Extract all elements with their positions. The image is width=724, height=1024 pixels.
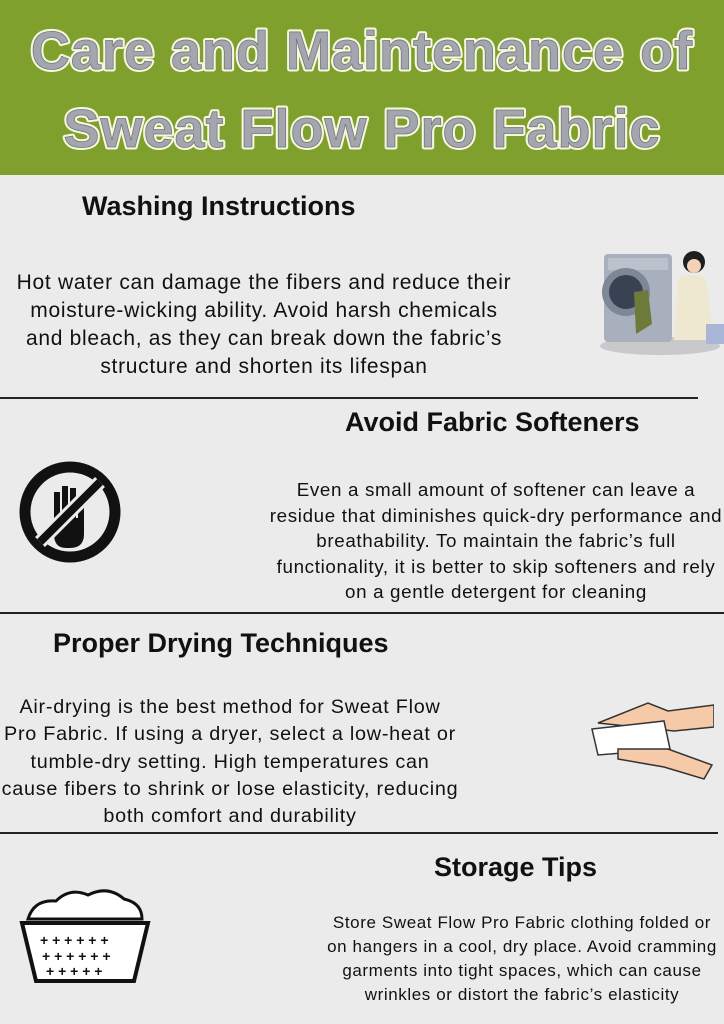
icon: laundry basket: + + + + + [46,963,102,979]
title: Care and Maintenance of [31,21,693,81]
header banner [0,0,724,175]
icon: no hand [20,462,120,562]
text: softeners: on a gentle detergent for cleaning [345,581,647,602]
text: storage: Store Sweat Flow Pro Fabric clothing folded or [333,913,711,932]
icon: hands with towel [591,702,714,780]
title [30,21,695,159]
section: washing instructions [17,191,724,378]
text: drying: Air-drying is the best method for Sweat Flow [19,696,441,718]
heading: washing: Washing Instructions [82,191,356,221]
text: softeners: residue that diminishes quick-dry performance and [270,504,722,526]
text: storage: wrinkles or distort the fabric’s elasticity [365,985,679,1004]
icon: washing machine woman [600,251,724,355]
text: softeners: Even a small amount of softener can leave a [297,479,695,500]
text: storage [327,913,717,1004]
section: avoid fabric softeners [20,407,722,602]
text: drying: Pro Fabric. If using a dryer, select a low-heat or [4,723,456,745]
icon: laundry basket [20,889,150,983]
text: drying: tumble-dry setting. High temperatures can [30,751,430,773]
text: drying: cause fibers to shrink or lose elasticity, reducing [2,778,458,800]
title: Sweat Flow Pro Fabric [63,99,661,159]
text: washing: Hot water can damage the fibers and reduce their [17,271,511,294]
title: Care and Maintenance of [31,21,693,81]
heading: softeners: Avoid Fabric Softeners [345,407,640,437]
icon: laundry basket: + + + + + + [42,948,111,964]
text: softeners [270,479,722,602]
section: proper drying [2,628,714,827]
text: washing: and bleach, as they can break down the fabric’s [26,327,502,350]
text: storage: on hangers in a cool, dry place. Avoid cramming [327,937,717,956]
heading: drying: Proper Drying Techniques [53,628,389,658]
text: washing: structure and shorten its lifespan [100,355,428,378]
text: drying: both comfort and durability [103,805,357,827]
text: softeners: breathability. To maintain the fabric’s full [316,530,676,551]
text: softeners: functionality, it is better to skip softeners and rely [277,556,715,576]
text: drying [2,696,458,827]
text: washing: moisture-wicking ability. Avoid harsh chemicals [30,299,498,322]
icon: laundry basket: + + + + + + [40,932,109,948]
text: washing [17,271,511,378]
section: storage tips [20,852,717,1004]
heading: storage: Storage Tips [434,852,597,882]
title: Sweat Flow Pro Fabric [63,99,661,159]
text: storage: garments into tight spaces, which can cause [342,961,702,980]
